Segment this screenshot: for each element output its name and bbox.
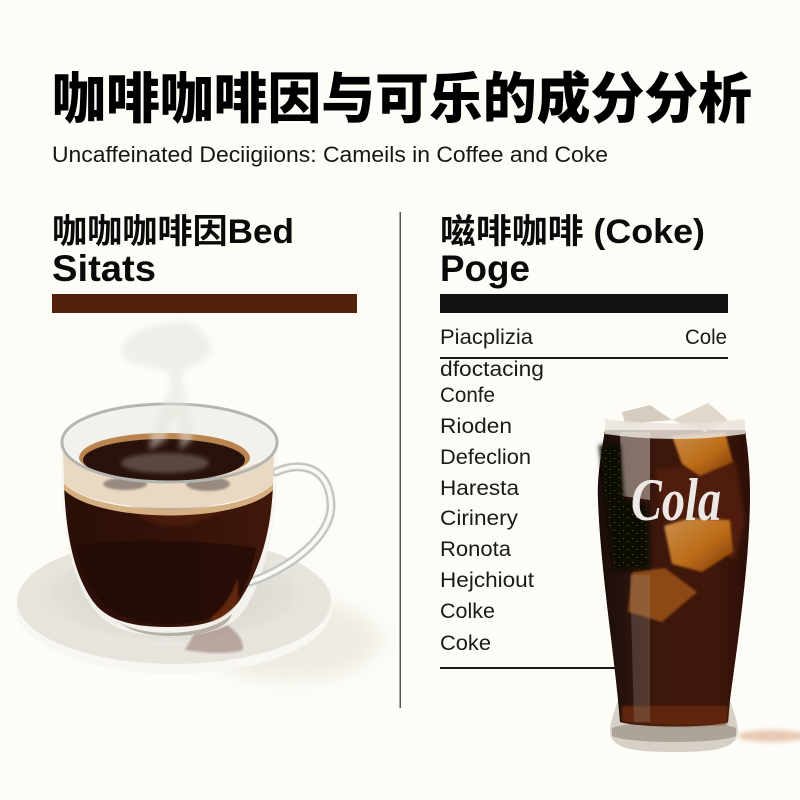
table rows: Rioden bbox=[440, 415, 512, 438]
front glass band with reflection bbox=[63, 452, 274, 508]
coke heading bbox=[440, 213, 705, 289]
table rows: Confe bbox=[440, 384, 495, 407]
table rows: Hejchiout bbox=[440, 569, 534, 592]
coffee heading bbox=[52, 213, 294, 289]
cup base bbox=[115, 614, 232, 636]
coffee brown bar bbox=[52, 294, 357, 313]
table rows: Coke bbox=[440, 632, 491, 655]
divider between panels bbox=[400, 212, 401, 708]
saucer shadow bbox=[200, 600, 380, 680]
table rows: Haresta bbox=[440, 477, 519, 500]
cup glass body bbox=[61, 442, 278, 636]
panel: coke bbox=[440, 213, 800, 752]
table header rule bbox=[440, 357, 728, 359]
coke black bar bbox=[440, 294, 728, 313]
table rows: Colke bbox=[440, 600, 495, 623]
crema line bbox=[64, 484, 273, 516]
steam bbox=[122, 322, 211, 450]
coke heading: Poge bbox=[440, 248, 530, 289]
ice cubes bbox=[622, 403, 745, 622]
icon: coffee cup on saucer bbox=[16, 322, 380, 680]
table rows bbox=[440, 358, 544, 655]
table bbox=[440, 326, 728, 669]
title: 咖啡咖啡因与可乐的成分分析 bbox=[52, 68, 752, 130]
coffee heading: Sitats bbox=[52, 248, 156, 289]
coke heading: 嗞啡咖啡 (Coke) bbox=[440, 213, 705, 251]
table rows: dfoctacing bbox=[440, 358, 544, 381]
inner rim area bbox=[64, 406, 275, 478]
table rows: Cirinery bbox=[440, 507, 519, 530]
table header: Cole bbox=[685, 326, 727, 349]
coffee surface bbox=[79, 433, 250, 479]
glass shadow bbox=[738, 730, 800, 742]
table header bbox=[440, 326, 727, 349]
glass highlight and condensation bbox=[620, 432, 650, 500]
glass rim bbox=[605, 419, 745, 439]
glass rim bbox=[62, 404, 277, 482]
cola liquid bbox=[598, 430, 750, 726]
cola logo text: Cola bbox=[631, 467, 721, 533]
table rows: Defeclion bbox=[440, 446, 531, 469]
glass base bbox=[610, 700, 738, 752]
icon: cola glass bbox=[598, 403, 800, 752]
table rows: Ronota bbox=[440, 538, 511, 561]
coffee liquid bbox=[64, 486, 273, 627]
saucer bbox=[16, 538, 332, 674]
cup handle bbox=[250, 467, 331, 582]
subtitle: Uncaffeinated Deciigiions: Cameils in Coffee and Coke bbox=[52, 142, 608, 167]
table bottom rule bbox=[440, 667, 618, 669]
table header: Piacplizia bbox=[440, 326, 533, 349]
coffee heading: 咖咖咖啡因Bed bbox=[52, 213, 294, 251]
panel: coffee bbox=[16, 213, 380, 680]
